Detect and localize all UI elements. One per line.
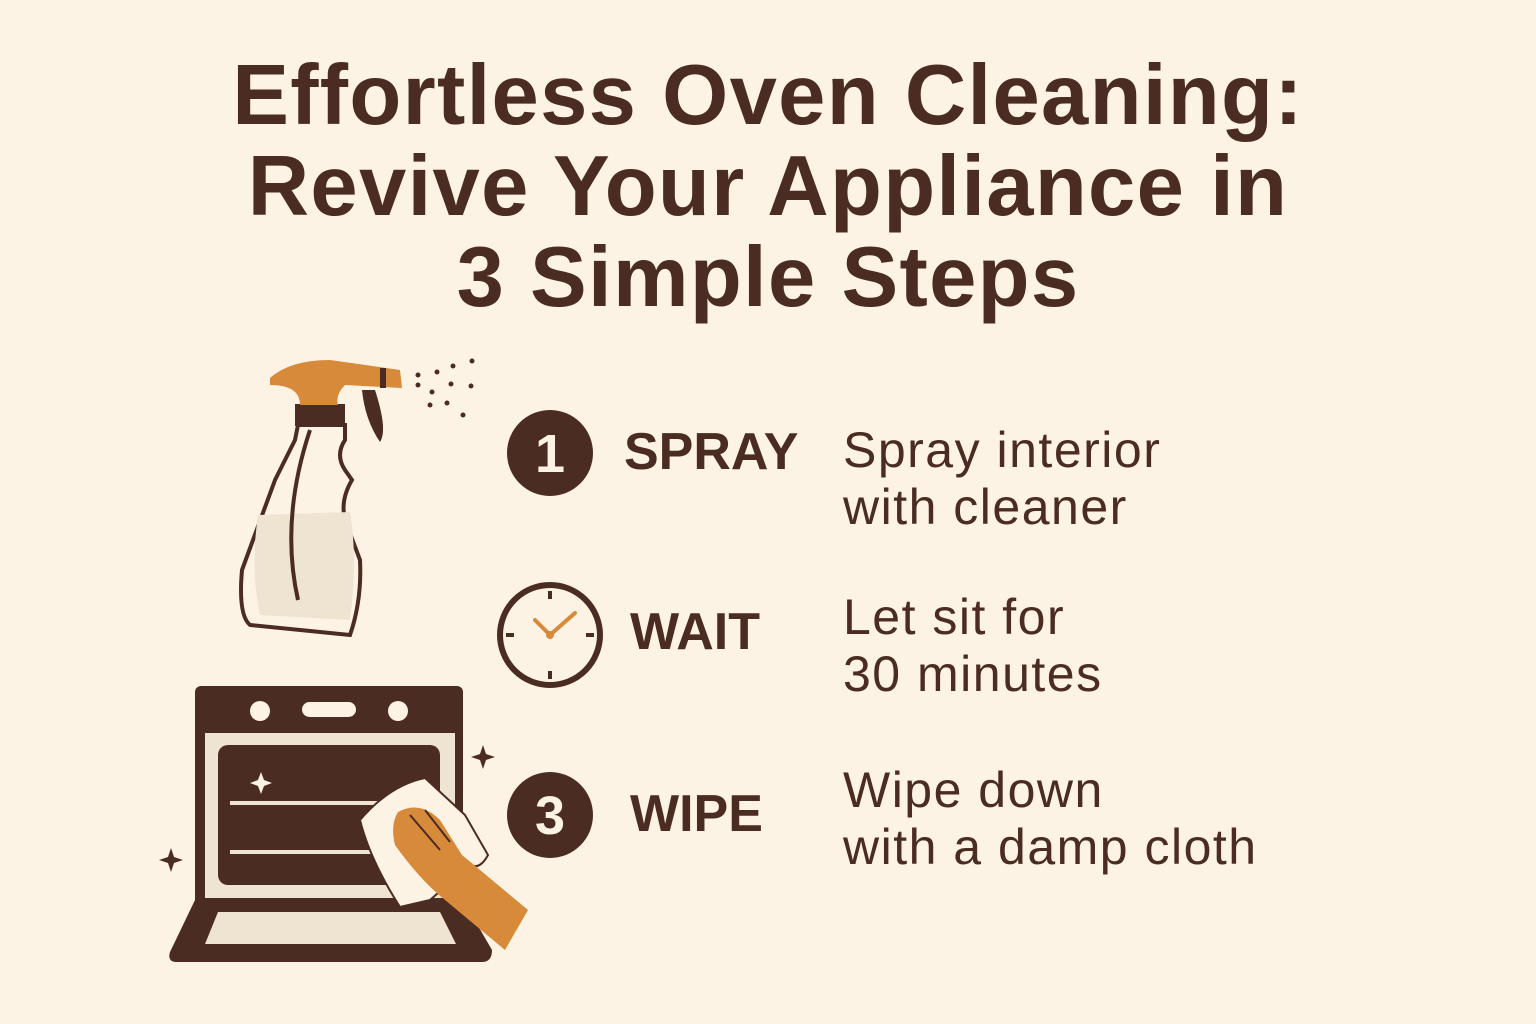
step 1 label: SPRAY [624,423,798,481]
step 1 description: Spray interior [843,422,1161,478]
icon: clock [500,585,600,685]
step 1 description: with cleaner [843,479,1128,535]
step 3 description [843,762,1258,875]
step 3 description: Wipe down [843,762,1104,818]
icon: step 1 circle: 1 [535,424,565,484]
step 2 description [843,589,1103,702]
icon: step 1 circle [507,410,593,496]
title: 3 Simple Steps [457,230,1079,325]
icon: step 3 circle: 3 [535,786,565,846]
icon: spray bottle [241,358,474,635]
step 3 description: with a damp cloth [843,819,1258,875]
step 2 label: WAIT [630,603,760,661]
step 2 description: Let sit for [843,589,1065,645]
icon: oven with hand and cloth [159,686,528,962]
title: Effortless Oven Cleaning: [232,48,1304,143]
step 1 description [843,422,1161,535]
title [232,48,1304,325]
step 3 label: WIPE [630,785,763,843]
step 2 description: 30 minutes [843,646,1103,702]
icon: step 3 circle [507,772,593,858]
title: Revive Your Appliance in [248,139,1288,234]
